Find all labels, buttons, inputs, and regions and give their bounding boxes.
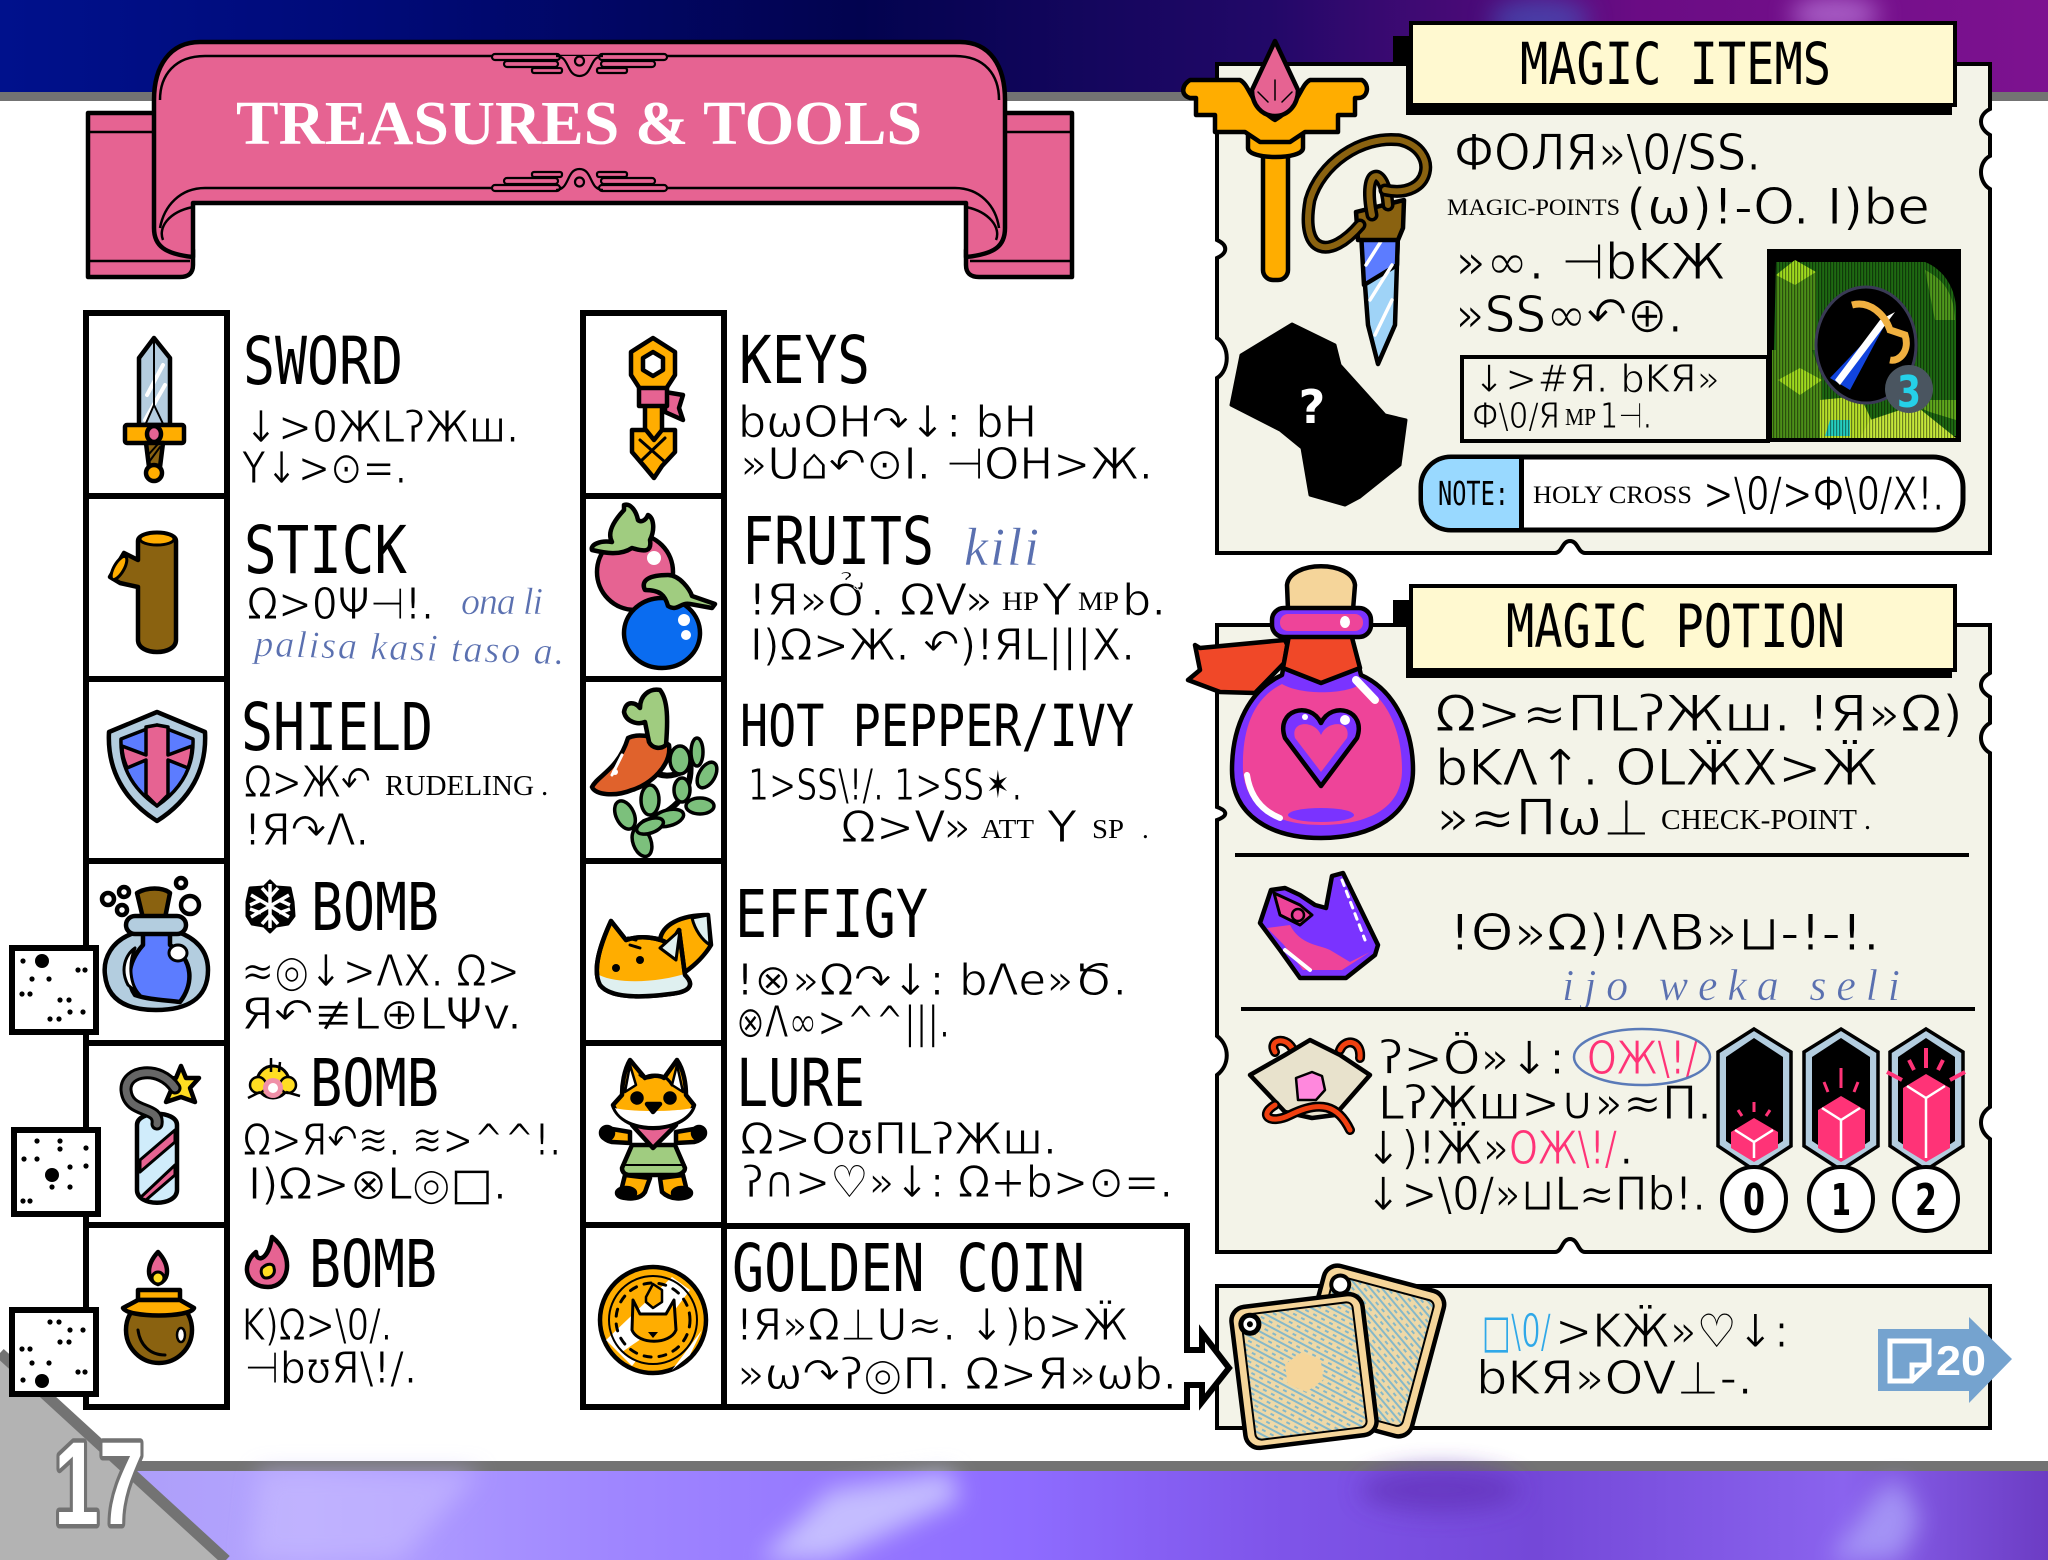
callout: note pill: NOTE:	[1438, 474, 1509, 513]
panel: left item table	[86, 313, 565, 1407]
text: effigy description: ⊗Λ∞>^^|||.	[736, 997, 950, 1048]
text: sword description: ↓>0ЖLʔЖш.	[244, 402, 519, 453]
callout: MP cost note: Ф\0/Я	[1472, 396, 1560, 437]
row: dynamite bomb	[126, 1045, 561, 1210]
text: golden coin description: !Я»Ω⊥U≈. ↓)b>Ӝ	[736, 1299, 1128, 1351]
dice panel: fire bomb	[12, 1310, 96, 1394]
icon: magic potion bottle	[1188, 566, 1413, 838]
text: fruits description: !Я»Ở. ΩV»	[748, 571, 993, 626]
row: sword	[125, 323, 519, 494]
icon: mystery silhouette	[1231, 324, 1406, 505]
text: golden coin description: »ω↷ʔ◎Π. Ω>Я»ωb.	[737, 1349, 1177, 1400]
handwritten note: stick: ona li	[461, 581, 543, 623]
text: fruits description: MP	[1078, 587, 1119, 616]
icon: shield	[109, 712, 205, 821]
text: fruits description: b.	[1122, 575, 1166, 626]
callout: MP cost note: ↓>#Я. bKЯ»	[1473, 357, 1720, 401]
text: gauge description: ↓>\0/»⊔L≈Πb!.	[1365, 1167, 1706, 1221]
text: gauge description: LʔЖш>∪»≈Π.	[1378, 1076, 1712, 1130]
text: dynamite bomb description	[243, 1115, 561, 1210]
heading: ice bomb: BOMB	[311, 869, 439, 946]
callout: MP cost note: MP	[1565, 405, 1596, 431]
screenshot: game item: 3	[1897, 367, 1921, 418]
text: dynamite bomb description: I)Ω>⊗L◎□.	[248, 1159, 507, 1210]
text: potion description: »≈Πω⊥	[1436, 789, 1650, 847]
gauge: level 2	[1887, 1029, 1965, 1170]
panel: magic potion	[1188, 566, 1990, 1252]
text: dynamite bomb description: Ω>Я↶≋. ≋>^^!.	[243, 1115, 561, 1166]
heading: keys: KEYS	[739, 322, 870, 399]
page corner with number 17: 17	[54, 1418, 144, 1550]
dice panel: dynamite bomb	[14, 1130, 98, 1214]
banner ornament top	[492, 54, 667, 76]
banner right tail	[966, 113, 1072, 277]
text: fruits description: Y	[1041, 575, 1072, 626]
icon: dynamite	[126, 1066, 199, 1203]
icon: ice bomb	[102, 878, 208, 1010]
handwritten note: stick	[251, 581, 565, 673]
panel outline: magic potion	[1217, 625, 1990, 1252]
text: gauge description: OЖ\!/	[1509, 1121, 1617, 1175]
handwritten note: stick: palisa kasi taso a.	[251, 623, 565, 673]
heading: shield: SHIELD	[241, 689, 433, 766]
text: fire bomb description	[242, 1300, 417, 1394]
text: gauge description: .	[1619, 1121, 1634, 1175]
gauge: level 0	[1718, 1029, 1791, 1170]
divider two	[1241, 1007, 1975, 1011]
text: pepper and ivy description: ATT	[981, 814, 1035, 844]
heading: sword: SWORD	[243, 323, 403, 400]
icon: fox effigy	[597, 915, 711, 996]
row: golden coin with arrow	[600, 1226, 1229, 1407]
text: effigy description	[736, 955, 1127, 1048]
text: magic items description	[1447, 124, 1930, 344]
text: fruits description	[748, 571, 1166, 671]
heading: fire bomb: BOMB	[309, 1226, 437, 1303]
text: keys description: »U⌂↶⊙I. ⊣OH>Ж.	[740, 439, 1153, 490]
screenshot: game item	[1768, 250, 1960, 441]
row: fruits	[592, 503, 1166, 671]
text: ice bomb description: ≈◎↓>ΛX. Ω>	[241, 946, 520, 997]
icon: stick	[108, 533, 176, 652]
banner: treasures and tools	[88, 42, 1072, 277]
text: pepper and ivy description: .	[1142, 814, 1149, 844]
icon: fire bomb	[123, 1252, 194, 1363]
text: stick description: Ω>0Ψ⊣!.	[247, 579, 434, 630]
row: pepper and ivy	[592, 690, 1149, 859]
icon: fruits	[592, 505, 715, 668]
panel: magic items	[1183, 23, 1990, 553]
text: gauge description: OЖ\!/	[1587, 1031, 1698, 1085]
title box: magic items	[1393, 23, 1955, 115]
text: golden coin description	[736, 1299, 1177, 1400]
icon: snowflake	[247, 881, 294, 932]
text: gauge description	[1365, 1031, 1712, 1221]
number badge: 0: 0	[1743, 1175, 1765, 1226]
number badge: 1: 1	[1831, 1175, 1851, 1226]
text: pepper and ivy description	[748, 760, 1149, 853]
text: cards description	[1476, 1304, 1789, 1405]
text: shield description	[244, 757, 548, 856]
text: gauge description: ʔ>Ӧ»↓:	[1379, 1031, 1565, 1085]
text: pepper and ivy description: SP	[1092, 814, 1124, 844]
icon: sword	[125, 338, 184, 481]
page corner with number 17	[0, 1353, 226, 1560]
icon: broken potion	[1260, 873, 1378, 978]
heading: lure: LURE	[736, 1045, 865, 1122]
heading: dynamite bomb: BOMB	[310, 1045, 439, 1122]
banner main ribbon	[154, 42, 1005, 257]
dice panel: ice bomb	[12, 948, 96, 1032]
number badge: 2: 2	[1915, 1175, 1937, 1226]
text: potion description: CHECK-POINT	[1661, 805, 1857, 836]
row: effigy	[597, 876, 1127, 1048]
text: ice bomb description	[241, 946, 522, 1040]
icon: crystal dagger on rope	[1308, 139, 1426, 364]
text: shield description: Ω>Ж↶	[244, 757, 371, 808]
banner ornament bottom	[492, 169, 667, 191]
number badge: 1	[1809, 1167, 1873, 1231]
table grid left	[86, 313, 227, 1407]
text: fruits description: HP	[1002, 587, 1039, 616]
panel outline: magic items	[1217, 64, 1990, 553]
text: pepper and ivy description: Ω>V»	[841, 802, 971, 853]
icon: flame	[247, 1237, 287, 1287]
text: magic items description: ФОЛЯ»\0/SS.	[1454, 124, 1761, 182]
outline and arrow to cards	[724, 1226, 1229, 1407]
text: shield description: !Я↷Λ.	[244, 805, 369, 856]
front card	[1230, 1292, 1378, 1450]
icon: torn cloth and ribbon	[1250, 1040, 1370, 1130]
text: cards description: bKЯ»OV⊥-.	[1476, 1351, 1753, 1405]
text: lure description: Ω>OʊΠLʔЖш.	[740, 1114, 1057, 1165]
row: fire bomb	[123, 1226, 437, 1394]
text: potion description: Ω>≈ΠLʔЖш. !Я»Ω)	[1435, 685, 1963, 743]
number badge: 2	[1894, 1167, 1958, 1231]
title box: magic potion	[1393, 586, 1955, 678]
text: keys description	[738, 397, 1153, 490]
icon: explosion	[248, 1058, 300, 1098]
callout: MP cost note: 1⊣.	[1600, 396, 1652, 437]
panel: cards	[1217, 1286, 2012, 1428]
panel outline: cards	[1217, 1286, 1990, 1428]
row: stick	[108, 512, 565, 673]
text: cards description: □\0/	[1482, 1304, 1551, 1358]
callout: note pill: HOLY CROSS	[1533, 482, 1692, 509]
text: pepper and ivy description: 1>SS\!/. 1>SS✶.	[748, 760, 1022, 811]
icon: cards	[1230, 1263, 1447, 1450]
text: lure description: ʔ∩>♡»↓: Ω+b>⊙=.	[742, 1157, 1173, 1208]
text: gauge description: ↓)!Ӝ»	[1365, 1121, 1509, 1175]
text: pepper and ivy description: Y	[1046, 802, 1077, 853]
number badge: 0	[1722, 1167, 1786, 1231]
row: shield	[109, 689, 548, 856]
table grid middle	[583, 313, 724, 1407]
text: shield description: RUDELING	[385, 770, 534, 802]
title box: magic potion: MAGIC POTION	[1506, 592, 1845, 662]
title box: magic items: MAGIC ITEMS	[1520, 30, 1831, 98]
heading: golden coin: GOLDEN COIN	[732, 1230, 1085, 1307]
callout: MP cost note	[1462, 357, 1768, 441]
handwritten circle around word	[1574, 1029, 1710, 1085]
text: ice bomb description: Я↶≢L⊕LΨv.	[241, 989, 522, 1040]
arrow: next page 20: 20	[1936, 1337, 1986, 1384]
row: lure	[601, 1045, 1173, 1208]
text: sword description: Y↓>⊙=.	[241, 443, 407, 494]
handwritten note: fruits: kili	[964, 517, 1039, 577]
text: broken potion description: !Θ»Ω)!ΛB»⊔-!-!.	[1449, 904, 1880, 962]
row: keys	[631, 322, 1153, 490]
gauge: level 1	[1804, 1029, 1878, 1170]
heading: pepper and ivy: HOT PEPPER/IVY	[740, 692, 1134, 760]
icon: key	[631, 338, 683, 478]
banner title: TREASURES & TOOLS	[236, 90, 922, 158]
banner left tail	[88, 113, 193, 277]
back card	[1289, 1263, 1447, 1439]
icon: fox doll lure	[601, 1060, 705, 1198]
row: ice bomb	[102, 869, 522, 1040]
text: keys description: bωOH↷↓: bH	[738, 397, 1037, 448]
text: magic items description: (ω)!-O. I)be	[1626, 178, 1930, 236]
icon: hot pepper and ivy	[592, 690, 721, 859]
text: potion description: .	[1864, 805, 1871, 836]
panel: middle item table	[583, 313, 1173, 1407]
heading: fruits: FRUITS	[742, 503, 934, 580]
callout: note pill: >\0/>Ф\0/X!.	[1703, 467, 1944, 521]
callout: note pill	[1421, 457, 1963, 530]
text: magic items description: »∞. ⊣bKЖ	[1455, 233, 1725, 291]
heading: stick: STICK	[244, 512, 407, 589]
text: lure description	[740, 1114, 1173, 1208]
text: potion description	[1435, 685, 1963, 847]
heading: effigy: EFFIGY	[735, 876, 928, 953]
handwritten note: potion: ijo weka seli	[1562, 961, 1900, 1010]
text: effigy description: !⊗»Ω↷↓: bΛe»Ծ.	[736, 955, 1127, 1006]
text: potion description: bKΛ↑. OLӜX>Ӝ	[1435, 739, 1878, 797]
text: sword description	[241, 402, 519, 494]
arrow: next page 20	[1878, 1317, 2012, 1403]
text: shield description: .	[541, 770, 548, 802]
divider one	[1235, 853, 1969, 857]
text: cards description: >KӜ»♡↓:	[1555, 1304, 1789, 1358]
text: magic items description: »SS∞↶⊕.	[1455, 286, 1683, 344]
text: fire bomb description: K)Ω>\0/.	[242, 1300, 392, 1351]
text: fruits description: I)Ω>Ж. ↶)!ЯL|||X.	[750, 620, 1135, 671]
text: fire bomb description: ⊣bʊЯ\!/.	[244, 1343, 417, 1394]
icon: mystery silhouette: ?	[1299, 380, 1325, 434]
text: magic items description: MAGIC-POINTS	[1447, 195, 1620, 220]
icon: winged staff	[1183, 41, 1367, 280]
icon: golden coin	[600, 1267, 706, 1373]
